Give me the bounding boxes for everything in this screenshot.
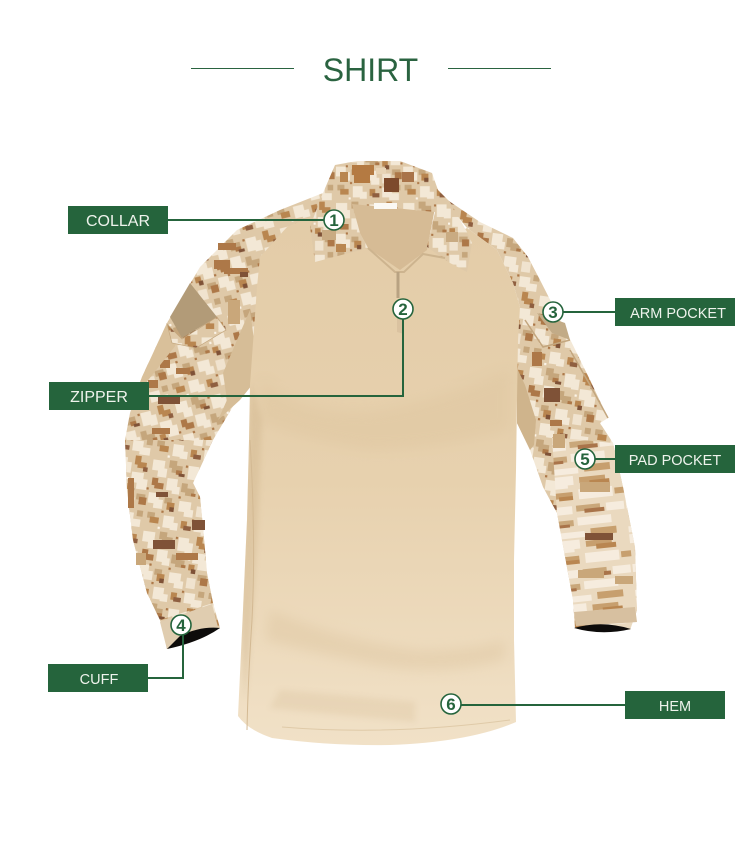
right pocket velcro bbox=[537, 313, 570, 340]
collar brown patches bbox=[322, 165, 458, 252]
right pocket flap edge bbox=[525, 320, 608, 418]
right sleeve bbox=[440, 195, 637, 632]
neck interior bbox=[348, 203, 435, 270]
label: hem bbox=[441, 691, 725, 719]
placket edges bbox=[368, 248, 445, 272]
label: pad pocket: 5 bbox=[580, 450, 590, 469]
left cuff opening bbox=[167, 628, 220, 649]
label: collar: 1 bbox=[329, 211, 339, 230]
heading text: SHIRT bbox=[323, 52, 418, 88]
right cuff opening bbox=[574, 624, 631, 632]
label: collar: COLLAR bbox=[86, 213, 150, 230]
label: hem: HEM bbox=[659, 699, 691, 715]
collar bbox=[310, 161, 472, 334]
label: cuff: CUFF bbox=[80, 672, 118, 688]
illustration: shirt bbox=[125, 161, 637, 745]
velcro patch bbox=[170, 283, 217, 338]
left sleeve bbox=[125, 193, 323, 649]
beige outer panel bbox=[134, 323, 176, 398]
folds bbox=[240, 370, 510, 722]
collar fabric bbox=[310, 161, 472, 272]
label: pad pocket bbox=[575, 445, 735, 473]
label: zipper bbox=[49, 299, 413, 410]
label: hem: 6 bbox=[446, 695, 456, 714]
left cuff band bbox=[160, 604, 218, 649]
label: zipper: ZIPPER bbox=[70, 389, 128, 406]
label: arm pocket: ARM POCKET bbox=[630, 306, 726, 322]
label: pad pocket: PAD POCKET bbox=[629, 453, 721, 469]
label: cuff bbox=[48, 615, 191, 692]
zipper bbox=[396, 272, 400, 298]
side seam bbox=[247, 440, 254, 730]
torso bbox=[238, 217, 520, 745]
label: arm pocket bbox=[543, 298, 735, 326]
camo patches: left sleeve bbox=[128, 243, 248, 565]
beige underarm panel bbox=[517, 368, 536, 450]
beige underarm panel bbox=[218, 310, 254, 420]
label: zipper: 2 bbox=[398, 300, 408, 319]
label: cuff: 4 bbox=[176, 616, 186, 635]
camo patches: right sleeve bbox=[532, 352, 633, 584]
label: collar bbox=[68, 206, 344, 234]
left pocket flap bbox=[167, 317, 226, 348]
neck tag bbox=[374, 203, 397, 209]
label: arm pocket: 3 bbox=[548, 303, 558, 322]
hem stitching bbox=[282, 720, 510, 730]
right cuff band bbox=[574, 607, 637, 626]
